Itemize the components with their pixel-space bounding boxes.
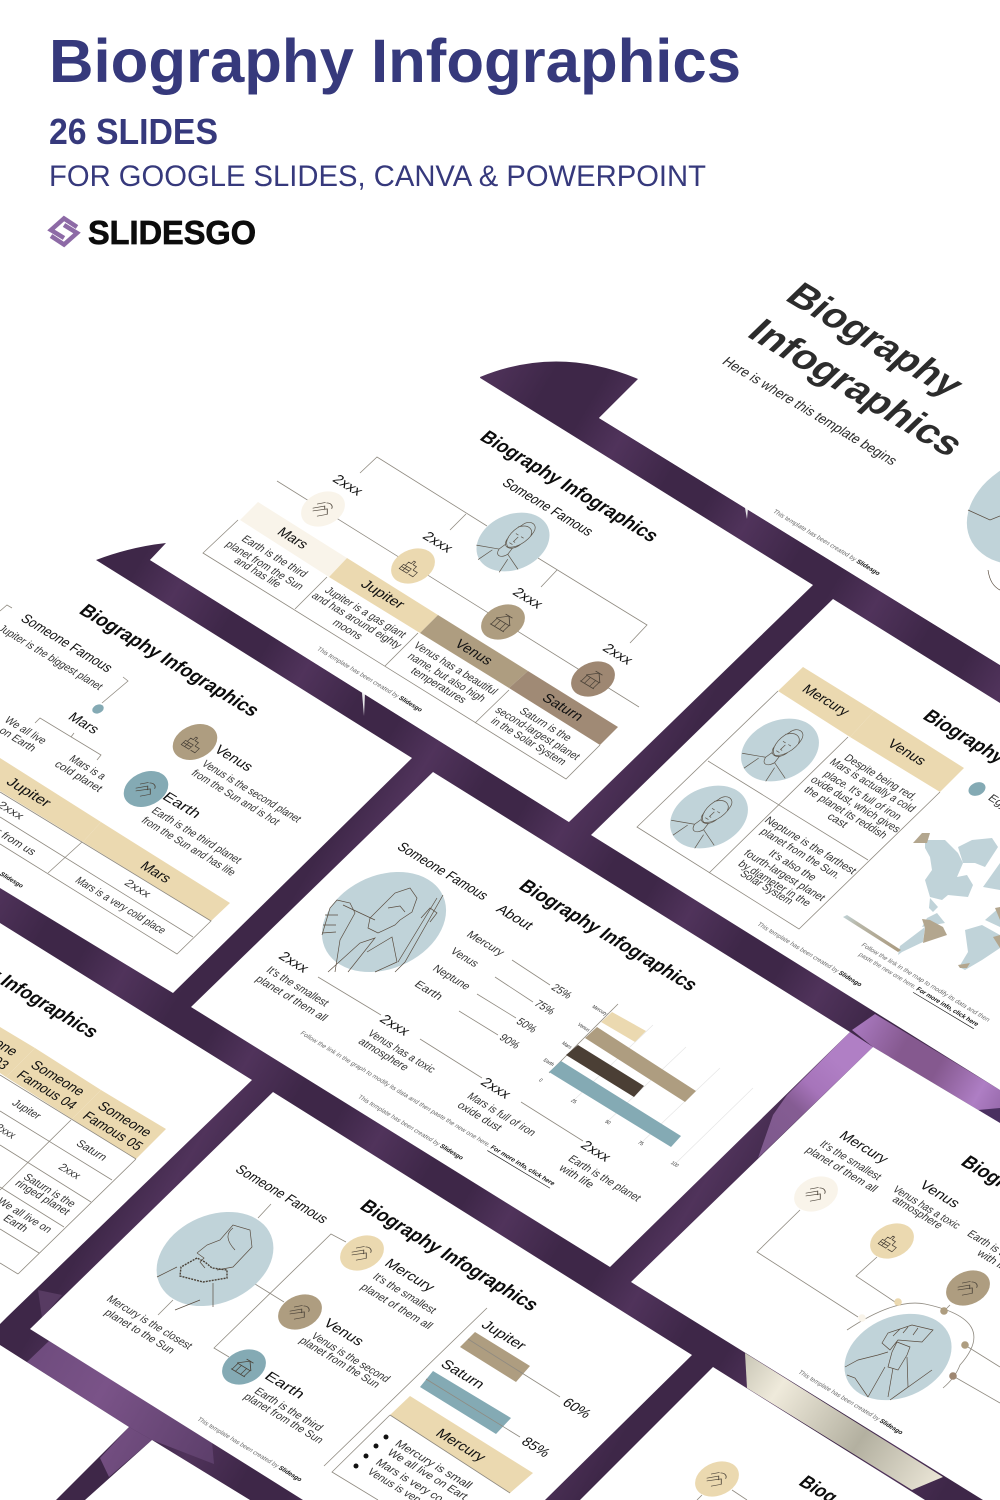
panel: bottom centre slide (85, 1440, 250, 1500)
bar chart: Venus (576, 1022, 591, 1033)
progress bar: Jupiter: Jupiter (478, 1317, 531, 1353)
item: Mercury: planet of them all (802, 1145, 880, 1195)
item: Mercury: It's the smallest (817, 1139, 884, 1183)
cover portrait (939, 434, 1000, 590)
text block: Mars: place. It's full of iron (820, 769, 904, 823)
footer: This template has been created by Slidesgo (356, 1095, 464, 1162)
portrait caption: planet to the Sun (101, 1308, 177, 1356)
portrait (296, 853, 472, 991)
progress bar: Jupiter: 60% (559, 1395, 595, 1421)
text block: Neptune: fourth-largest planet (741, 848, 827, 904)
bar chart: 50 (603, 1119, 612, 1126)
text block: Neptune: Neptune is the farthest (762, 815, 858, 877)
text block: Mars: oxide dust, which gives (807, 775, 903, 835)
table headers: Famous 05 (79, 1109, 147, 1153)
panel: arc timeline slide (631, 1047, 1000, 1500)
text block: Mars: Earth is the third (238, 534, 310, 580)
text block: Neptune: by diameter in the (735, 859, 813, 909)
timeline icons (292, 485, 624, 703)
table cells: 2xxx (55, 1162, 83, 1182)
chart note: Follow the link in the graph to modify its data and then paste the new one here. For more info, click here (298, 1031, 556, 1188)
timeline: Venus has a toxic (365, 1029, 437, 1075)
table lines (637, 691, 940, 929)
timeline years: 2xxx (599, 641, 637, 668)
table headers: Mars (274, 524, 312, 552)
table headers (240, 502, 618, 745)
timeline: 2xxx (577, 1138, 615, 1165)
table headers: Mercury (799, 681, 854, 719)
legend: Egypt (965, 780, 1000, 817)
map note: paste the new one here. For more info, click here (857, 952, 980, 1028)
cover subtitle: Here is where this template begins (719, 354, 901, 468)
heading: Biography Infographics (476, 426, 664, 546)
item: Earth: Earth is the third planet (148, 806, 244, 866)
table lines (0, 1075, 136, 1274)
item: Earth: from the Sun and has life (138, 816, 238, 879)
bar chart: 25 (569, 1098, 578, 1105)
timeline: Earth is the planet (565, 1154, 643, 1204)
heading: Biography Infographics (75, 600, 265, 720)
timeline (252, 949, 643, 1204)
map note: Follow the link in the map to modify its data and then (859, 943, 991, 1023)
text block: Venus: name, but also high (404, 651, 488, 705)
portrait (132, 1194, 298, 1324)
footer: This template has been created by Slidesgo (315, 647, 423, 714)
footer: This template has been created by Slidesgo (755, 922, 863, 988)
heading: Biography Infographics (515, 875, 703, 995)
portrait (461, 502, 565, 582)
tree connectors (0, 605, 128, 760)
person name: Someone Famous (232, 1162, 332, 1226)
map scale bar (843, 915, 901, 952)
node: Mars: Mars (65, 709, 103, 737)
arc nodes (858, 1298, 969, 1380)
timeline years: 2xxx (509, 585, 547, 612)
text block: Saturn: in the Solar System (488, 716, 569, 768)
text block: Venus: Venus has a beautiful (410, 641, 500, 697)
bar chart: Mars (560, 1041, 573, 1051)
text block: Jupiter: Jupiter is a gas giant (322, 585, 408, 641)
connectors and arc (757, 1210, 1000, 1403)
panel: portrait and progress slide (30, 1092, 692, 1500)
text block: Mars (801, 753, 919, 841)
timeline: oxide dust (454, 1100, 504, 1134)
table (0, 758, 230, 954)
node: Mars: cold planet (51, 759, 105, 795)
item: Venus: Venus is the second planet (199, 759, 303, 825)
node: Mars (0, 709, 108, 795)
percentage list: Venus (447, 946, 481, 970)
bar chart: 75 (636, 1140, 645, 1147)
table headers: Jupiter (357, 576, 409, 612)
table cells: Earth (0, 1213, 30, 1235)
node dot (90, 703, 106, 715)
timeline: planet of them all (252, 974, 330, 1024)
table headers: Saturn (539, 690, 587, 724)
panel: bottom right slide (580, 1367, 925, 1500)
table cells: Saturn is the (20, 1172, 78, 1210)
portrait: lower (654, 774, 764, 860)
world map (898, 833, 1000, 970)
connectors (158, 1204, 487, 1466)
table: Mars is a very cold place (72, 876, 168, 936)
item: Mercury: Mercury (381, 1256, 439, 1295)
progress bar: Saturn: 85% (518, 1434, 554, 1460)
header: compatibility subtitle: FOR GOOGLE SLIDES, CANVA & POWERPOINT (49, 160, 706, 193)
item: Earth: Earth (261, 1369, 309, 1401)
heading: cover title (739, 276, 973, 464)
footer: This template has been created by Slidesgo (796, 1370, 904, 1436)
percentage list: 25% (548, 983, 574, 1001)
timeline: 2xxx (376, 1012, 414, 1039)
timeline years (329, 472, 637, 668)
panel: biography chart slide (191, 772, 850, 1267)
item: Venus (269, 1288, 392, 1390)
table outline (203, 520, 600, 779)
timeline: atmosphere (355, 1037, 411, 1073)
bullet table: Mars is very co (373, 1458, 446, 1500)
about label: About (493, 902, 537, 933)
portrait: upper (725, 707, 835, 793)
item: Venus: planet from the Sun (296, 1336, 382, 1390)
percentage list: Mercury (464, 930, 507, 959)
percentage list (411, 930, 574, 1051)
timeline: Mars is full of iron (464, 1091, 538, 1139)
item: Venus: Venus is the second (308, 1331, 392, 1385)
item: Earth (213, 1343, 326, 1446)
timeline: with life (555, 1163, 596, 1191)
cover footer: This template has been created by Slidesgo (771, 509, 881, 577)
item: Venus: Venus (211, 742, 257, 774)
table cells: Jupiter (9, 1098, 44, 1122)
text block: Jupiter: moons (329, 618, 365, 642)
table headers: Someone (27, 1057, 89, 1099)
item: Earth: Earth (159, 789, 205, 821)
text block: Mars: Mars is actually a cold (827, 757, 918, 815)
table headers: Someone (94, 1098, 156, 1140)
timeline connectors (277, 457, 647, 707)
portrait caption: Mercury is the closest (104, 1294, 194, 1352)
portrait (822, 1298, 974, 1416)
text block: Neptune (735, 815, 858, 909)
text block: Saturn: Saturn is the (516, 706, 574, 744)
percentage list: 75% (531, 999, 557, 1017)
item: Venus: from the Sun and is hot (188, 768, 282, 828)
text block: Neptune: It's also the (765, 848, 819, 884)
text block: Mars: cast (824, 812, 850, 830)
percentage list: Neptune (430, 964, 473, 993)
timeline: 2xxx (275, 949, 313, 976)
item: Earth (937, 1229, 1000, 1312)
item: Mercury: It's the smallest (370, 1272, 438, 1316)
panel: timeline slide (150, 325, 813, 822)
panel: purple slide backdrop (0, 361, 1000, 1500)
icon circle (686, 1455, 748, 1500)
person name: Someone Famous (394, 839, 492, 903)
table: 2xxx (121, 878, 154, 901)
text block: Venus: temperatures (408, 666, 468, 706)
bar chart: Mercury (590, 1004, 609, 1017)
logo: Slidesgo: SLIDESGO (88, 214, 256, 251)
item: Venus: Venus has a toxic (890, 1185, 962, 1231)
progress bar: Saturn: Saturn (437, 1356, 489, 1392)
percentage list: 90% (496, 1033, 522, 1051)
bar chart (537, 1004, 753, 1169)
text block: Mars: the planet its reddish (801, 785, 889, 841)
panel: bottom left slide (0, 1345, 129, 1500)
panel: family tree slide (0, 500, 412, 993)
table headers: Famous 04 (13, 1068, 81, 1112)
person name: Someone Famous (17, 611, 117, 675)
bullet table: We all live on Eart (384, 1448, 470, 1500)
bar chart: 100 (669, 1160, 680, 1169)
table cells (0, 1098, 109, 1236)
text block: Mars: and has life (231, 556, 283, 590)
header: title: Biography Infographics (49, 27, 741, 95)
item: Venus: Venus (320, 1316, 368, 1349)
panel: cover slide (599, 258, 1000, 665)
node: Mars: Mars is a (66, 754, 108, 782)
node: Mars: We all live (1, 715, 49, 747)
bullet table (332, 1396, 533, 1500)
bar chart: Earth (541, 1058, 556, 1068)
table cells: Saturn (73, 1139, 109, 1163)
item: Venus: atmosphere (889, 1195, 945, 1231)
item: Mercury (785, 1128, 892, 1218)
footer: This template has been created by Slidesgo (195, 1417, 303, 1483)
bullet table: Mercury (432, 1426, 490, 1465)
table headers (778, 667, 964, 792)
item: Earth: planet from the Sun (241, 1392, 326, 1446)
text block: Mars: Despite being red, (841, 753, 919, 803)
timeline years: 2xxx (329, 472, 367, 499)
heading: Biography Infographics (356, 1195, 544, 1315)
item: Earth: Earth is the third (251, 1386, 325, 1434)
panel: comparison table slide (0, 922, 252, 1324)
text block: Neptune: planet from the Sun. (757, 827, 843, 881)
table: Mars (137, 858, 175, 886)
table headers: Venus (884, 736, 930, 768)
text block: Saturn: second-largest planet (492, 705, 582, 763)
table cells: ringed planet (12, 1178, 72, 1218)
text block: Jupiter: and has around eighty (308, 591, 404, 652)
bullet table: Mercury is small (392, 1439, 474, 1491)
bar chart: 0 (537, 1078, 544, 1084)
item: Venus: Venus (916, 1178, 964, 1211)
item: Mercury (331, 1229, 439, 1332)
heading: cover title: Biography (777, 276, 973, 404)
progress bar: Saturn (420, 1356, 554, 1460)
header: slide count: 26 SLIDES (49, 111, 218, 152)
progress bar: Jupiter (460, 1317, 595, 1421)
percentage list: Earth (411, 979, 445, 1003)
item: Mercury: planet of them all (357, 1282, 435, 1332)
item: Venus (164, 717, 303, 828)
panel: portrait table and map slide (591, 599, 1000, 1090)
person name: Someone Famous (499, 475, 597, 539)
text block: Neptune: Solar System (737, 869, 795, 907)
heading: cover title: Infographics (739, 312, 973, 464)
item: Mercury: Mercury (836, 1128, 892, 1166)
item: Venus (861, 1178, 964, 1265)
table headers (0, 1017, 166, 1159)
percentage list: 50% (513, 1017, 539, 1035)
timeline years: 2xxx (419, 529, 457, 556)
text block: Mars: planet from the Sun (222, 539, 306, 593)
timeline: 2xxx (477, 1075, 515, 1102)
timeline: It's the smallest (263, 965, 331, 1009)
table: Jupiter (3, 774, 56, 810)
item: Earth (115, 764, 244, 879)
table headers: Venus (451, 636, 497, 668)
